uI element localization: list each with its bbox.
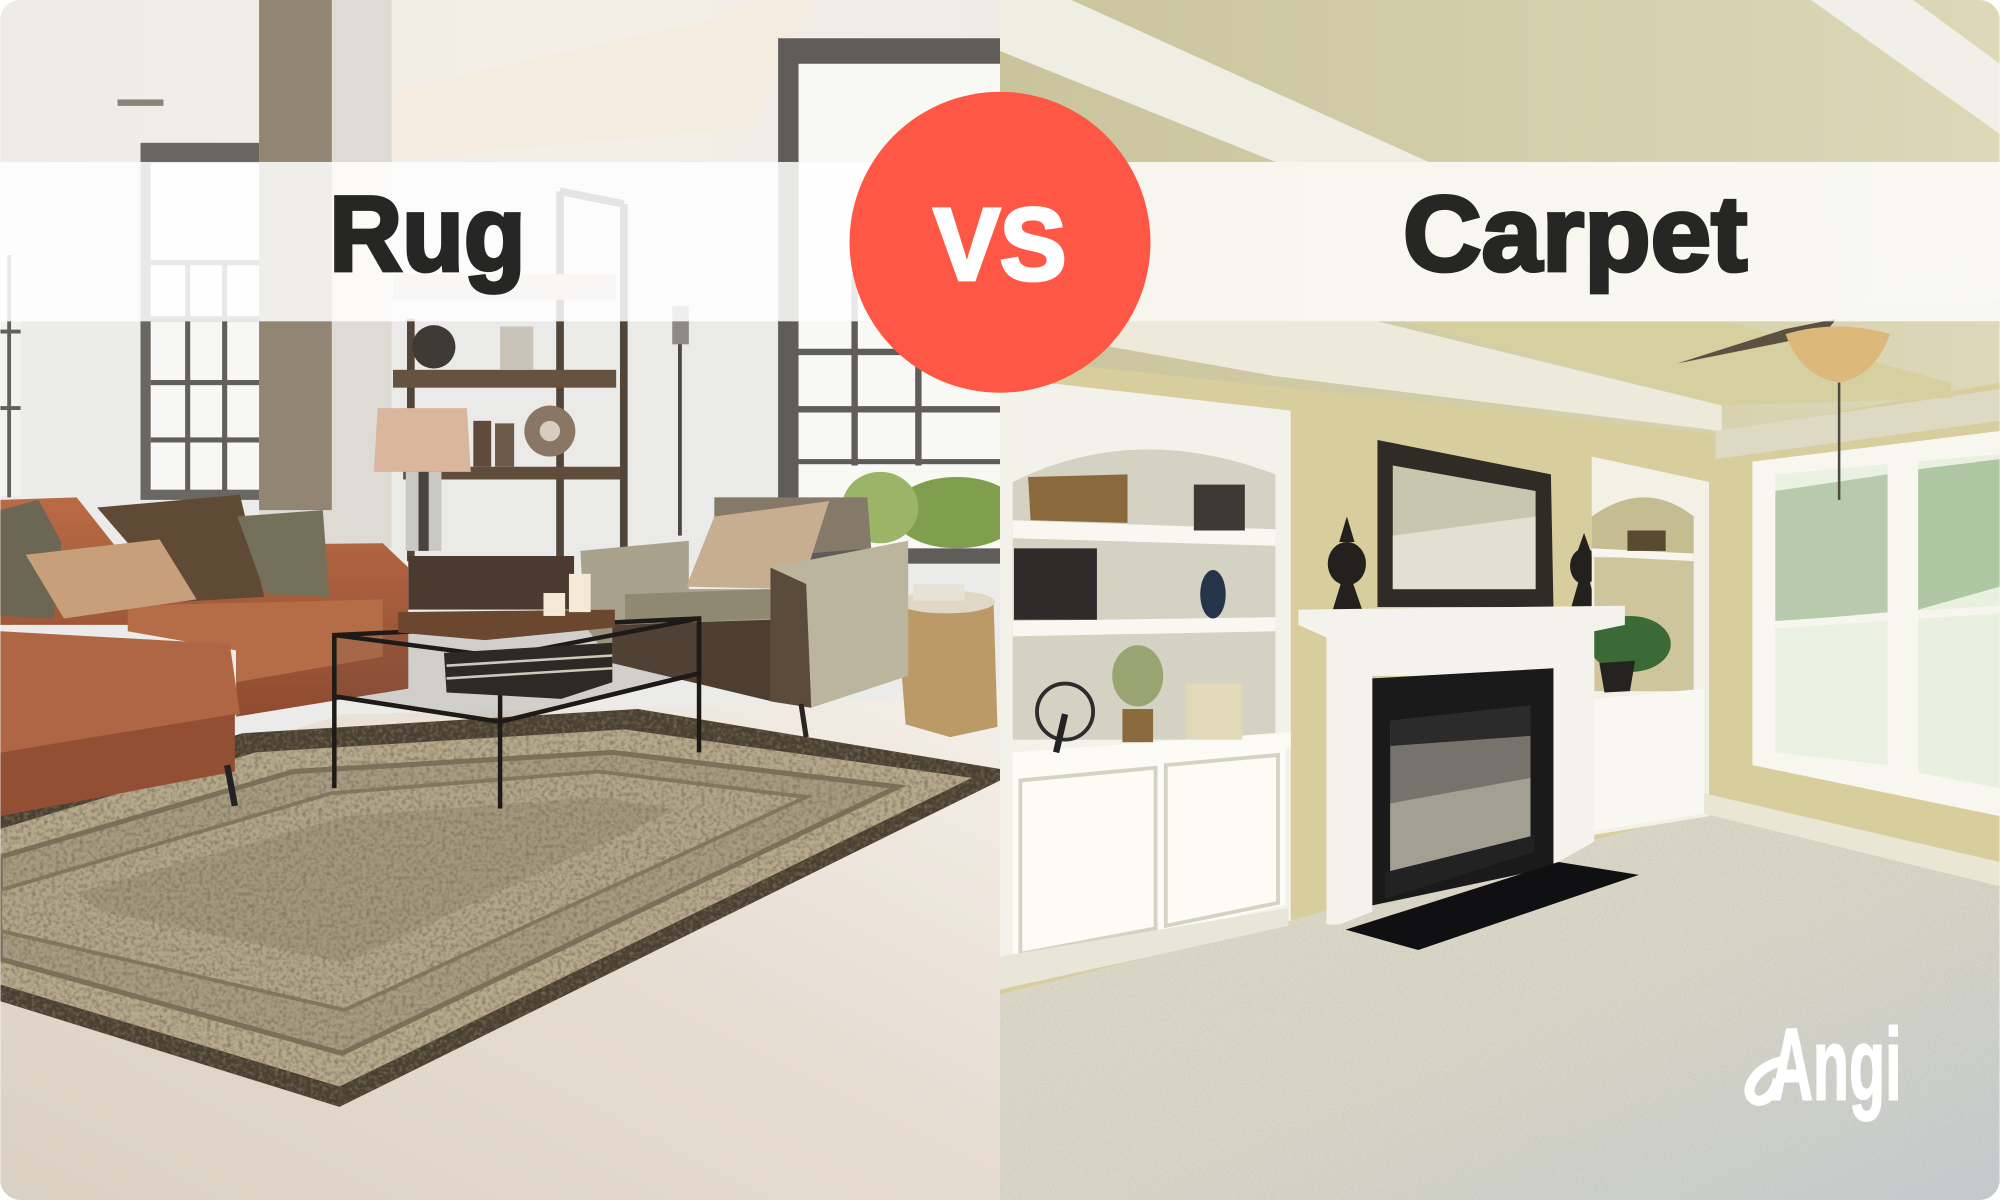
urns — [1328, 516, 1598, 610]
logo: Angi: Angi — [1770, 1007, 1902, 1121]
VS badge — [850, 92, 1150, 393]
logo: Angi — [1744, 1024, 1898, 1122]
floor — [0, 689, 1000, 1200]
heading: Carpet: Carpet — [1403, 173, 1747, 293]
ceiling beam mouldings — [1000, 0, 2000, 459]
VS badge: VS — [934, 187, 1066, 301]
ceiling — [1000, 0, 2000, 434]
cabinet doors — [1000, 747, 1288, 990]
right window — [1752, 431, 2000, 816]
table lamp — [374, 408, 471, 551]
baseboard — [1704, 793, 2000, 886]
wall and ceiling — [0, 0, 1000, 736]
sectional sofa — [0, 495, 408, 816]
fireplace mantel — [1298, 606, 1639, 950]
armchair — [580, 497, 908, 737]
shelving unit — [393, 191, 624, 612]
title band left — [0, 162, 872, 322]
built-in left shelves — [1000, 377, 1291, 988]
side table — [897, 584, 997, 737]
panel: carpet room photo — [1000, 0, 2000, 1200]
right shelf — [1589, 457, 1709, 835]
rug — [0, 689, 1000, 1122]
right window — [778, 38, 1020, 564]
panel: rug room photo — [0, 0, 1020, 1200]
heading: Rug: Rug — [329, 173, 526, 293]
title band right — [1127, 162, 2000, 322]
ceiling fan — [1678, 318, 1890, 500]
mirror — [1377, 440, 1553, 607]
coffee table — [334, 574, 699, 809]
floor lamp — [672, 306, 689, 536]
carpet floor — [1000, 803, 2000, 1200]
wall — [1000, 357, 2000, 995]
concrete column — [259, 0, 392, 548]
left windows — [0, 143, 262, 500]
